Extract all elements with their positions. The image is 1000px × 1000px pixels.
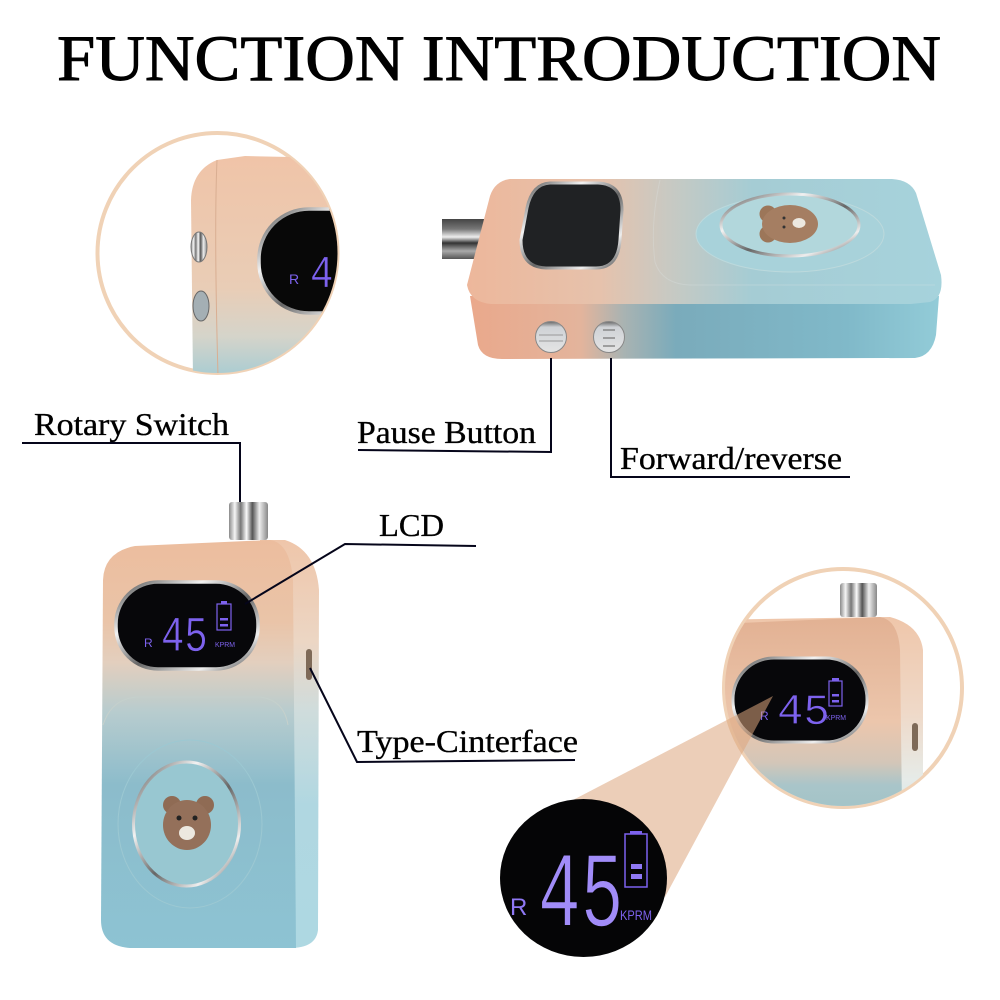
- screen readout: [290, 257, 332, 287]
- bear window ring: [134, 762, 240, 886]
- screen readout: R: [289, 271, 299, 287]
- type-C port: [306, 649, 312, 680]
- callout: rotary switch: [22, 406, 240, 502]
- circle frame: [98, 133, 338, 373]
- LCD readout: R: [144, 636, 153, 650]
- raised panel: [653, 180, 935, 285]
- bear badge, rotated: [760, 205, 818, 243]
- callout: forward/reverse: [611, 358, 850, 477]
- rotary knob: [840, 583, 877, 617]
- callout: type-C interface: [310, 668, 578, 762]
- callout: LCD: [245, 507, 476, 604]
- callout: pause button: Pause Button: [357, 414, 536, 450]
- bear badge: [163, 796, 214, 850]
- callout: type-C interface: Type-Cinterface: [357, 723, 578, 759]
- pause button, side: [191, 232, 207, 262]
- circle frame: [724, 569, 962, 807]
- side of body: [250, 540, 319, 948]
- type-C port: [912, 723, 918, 751]
- LCD readout: 45: [777, 688, 830, 738]
- LCD screen, off: [521, 183, 622, 268]
- outer disc: [118, 740, 262, 908]
- LCD readout: KPRM: [826, 715, 846, 722]
- LCD readout: [144, 601, 235, 667]
- magnifier wedge: [573, 696, 773, 897]
- rotary knob: [229, 502, 268, 540]
- LCD readout: 45: [161, 611, 208, 667]
- magnified readout: R: [510, 894, 527, 921]
- device close-up: [725, 583, 923, 806]
- battery icon: [625, 831, 647, 887]
- pause button: [536, 322, 566, 352]
- rotary knob, horizontal: [442, 219, 487, 259]
- LCD readout: KPRM: [215, 642, 235, 649]
- magnified readout: [510, 831, 652, 959]
- raised lower panel: [103, 697, 288, 725]
- callout: pause button: [357, 358, 551, 452]
- magnified readout: 45: [538, 837, 624, 959]
- device: front view: [101, 502, 319, 948]
- title: FUNCTION INTRODUCTION: [57, 23, 941, 95]
- LCD screen: [116, 582, 258, 669]
- device side close-up: [190, 156, 338, 373]
- bear window ring: [721, 194, 859, 256]
- callout: LCD: LCD: [379, 507, 444, 543]
- panel: side detail circle: [96, 131, 340, 375]
- callout: rotary switch: Rotary Switch: [34, 406, 229, 442]
- direction button, side: [193, 291, 209, 321]
- magnified LCD circle: [500, 799, 667, 959]
- LCD readout: [761, 678, 846, 724]
- LCD screen: [733, 658, 867, 742]
- magnified readout: KPRM: [620, 907, 652, 923]
- panel: LCD detail circle: [700, 569, 962, 810]
- LCD screen: [257, 207, 338, 315]
- callout: forward/reverse: Forward/reverse: [620, 440, 842, 476]
- device: top view: [442, 179, 942, 359]
- screen readout: 4: [310, 248, 333, 301]
- forward/reverse button: [594, 322, 624, 352]
- upper face: [467, 179, 942, 304]
- front of body: [101, 540, 296, 948]
- outer disc: [696, 196, 884, 272]
- LCD readout: R: [760, 709, 769, 723]
- lower body: [470, 296, 939, 359]
